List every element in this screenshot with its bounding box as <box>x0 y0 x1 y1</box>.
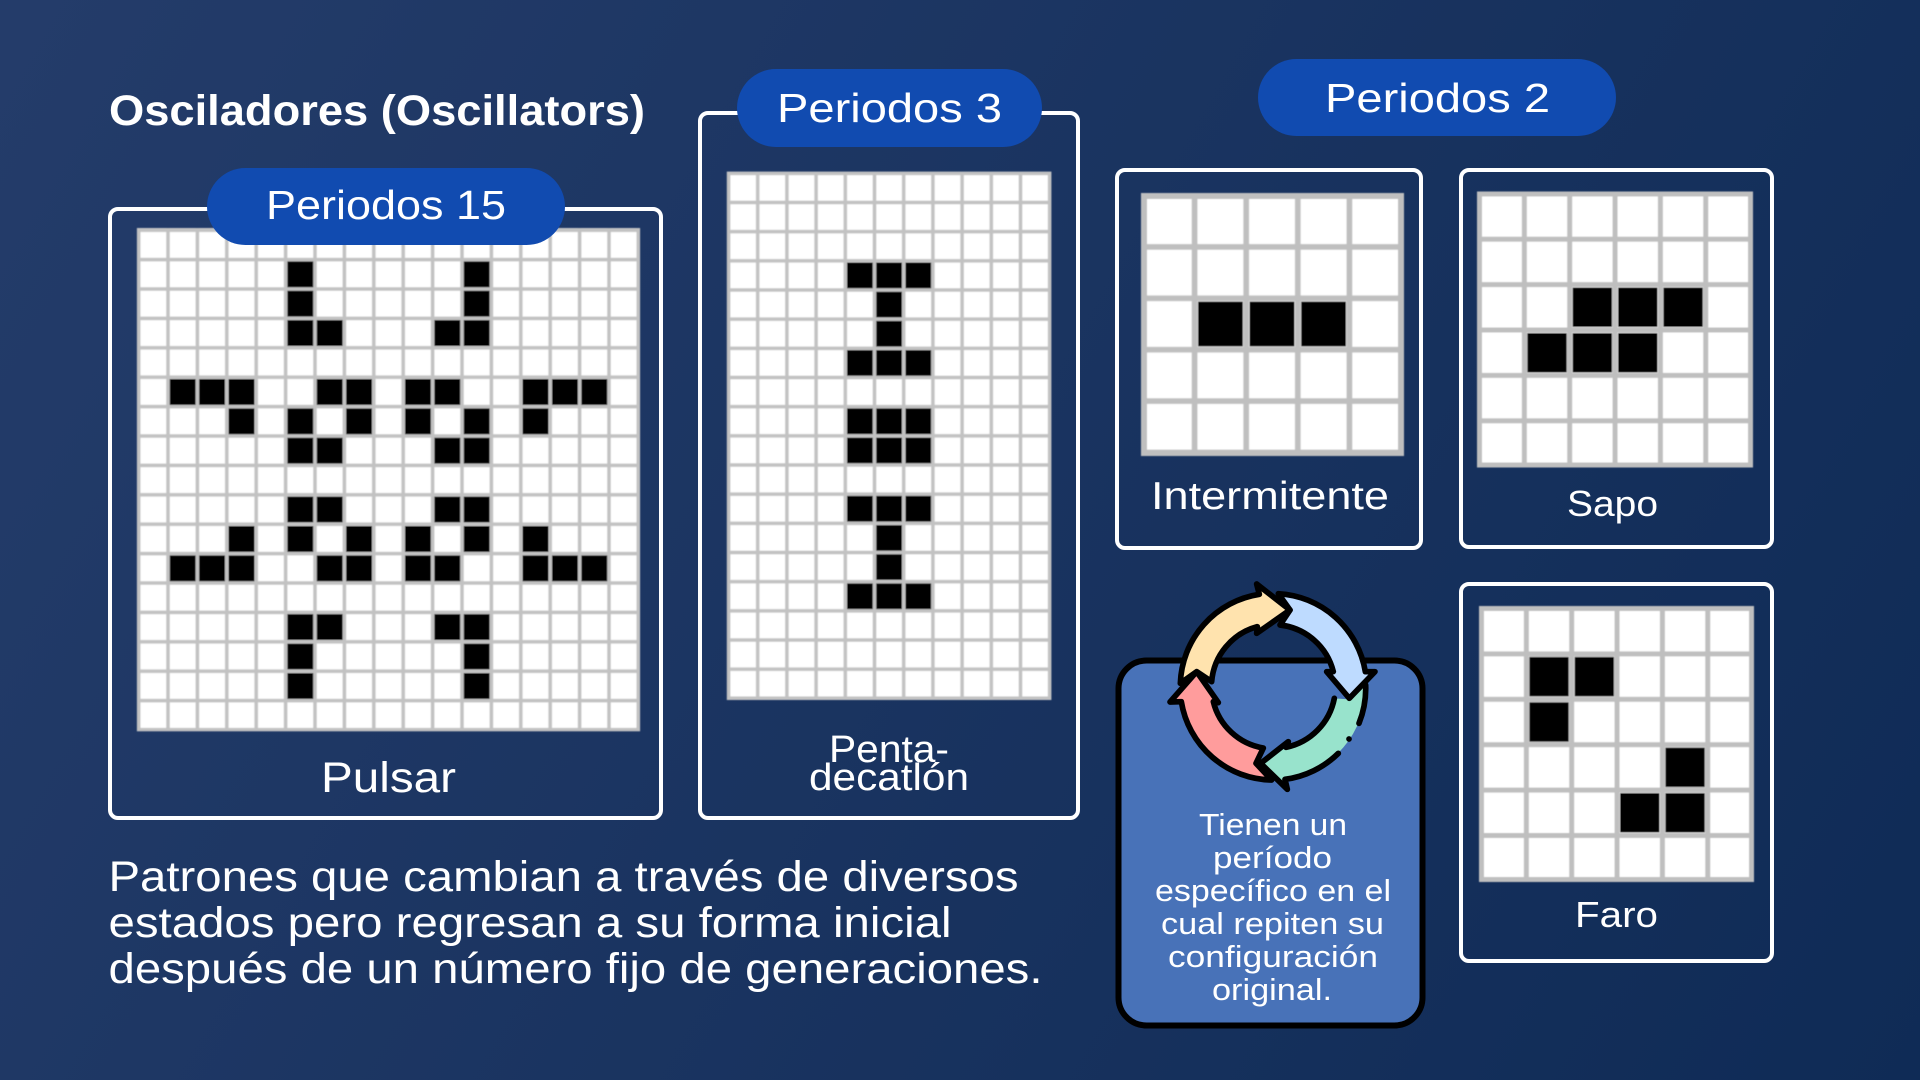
beacon grid <box>1479 606 1754 882</box>
icon: cycle arrows <box>1170 584 1375 789</box>
panel: Pulsar <box>110 168 661 818</box>
arrow: red <box>1170 672 1272 780</box>
callout card <box>1118 660 1422 1026</box>
label: Faro: Faro <box>1575 894 1658 935</box>
panel: Sapo <box>1461 170 1772 547</box>
callout text: original. <box>1212 972 1332 1007</box>
description paragraph: estados pero regresan a su forma inicial <box>108 899 952 947</box>
description paragraph: Patrones que cambian a través de diversos <box>108 853 1018 901</box>
label: Penta-decatlón <box>809 729 969 799</box>
callout text: específico en el <box>1155 873 1391 908</box>
arrow: green fill <box>1261 685 1366 789</box>
arrow: green outline <box>1261 685 1366 789</box>
label: Pulsar: Pulsar <box>321 754 456 802</box>
title: Osciladores (Oscillators) <box>109 87 645 135</box>
callout text: configuración <box>1168 939 1378 974</box>
panel: Intermitente <box>1117 170 1421 548</box>
description paragraph <box>108 853 1042 993</box>
label: Sapo: Sapo <box>1567 483 1658 524</box>
blinker grid <box>1141 193 1404 456</box>
arrow: yellow <box>1180 584 1290 683</box>
pulsar grid <box>137 228 640 731</box>
pill: Periodos 3: Periodos 3 <box>777 85 1002 131</box>
callout text <box>1155 807 1391 1007</box>
pill: Periodos 2 <box>1258 59 1616 136</box>
label: Intermitente: Intermitente <box>1151 475 1389 518</box>
panel: Faro <box>1461 584 1772 961</box>
label: Penta-decatlón: decatlón <box>809 757 969 799</box>
pill: Periodos 2: Periodos 2 <box>1325 75 1550 121</box>
label: Penta-decatlón: Penta- <box>829 729 949 771</box>
panel: Pentadecatlón <box>700 69 1078 818</box>
pill: Periodos 15 <box>207 168 565 245</box>
toad grid <box>1477 192 1753 468</box>
pentadecathlon grid <box>727 172 1051 700</box>
description paragraph: después de un número fijo de generaciones. <box>108 945 1042 993</box>
arrow: blue <box>1278 594 1375 698</box>
callout text: período <box>1213 840 1332 875</box>
pill: Periodos 3 <box>737 69 1042 147</box>
callout text: Tienen un <box>1199 807 1347 842</box>
callout text: cual repiten su <box>1161 906 1384 941</box>
pill: Periodos 15: Periodos 15 <box>266 182 506 228</box>
